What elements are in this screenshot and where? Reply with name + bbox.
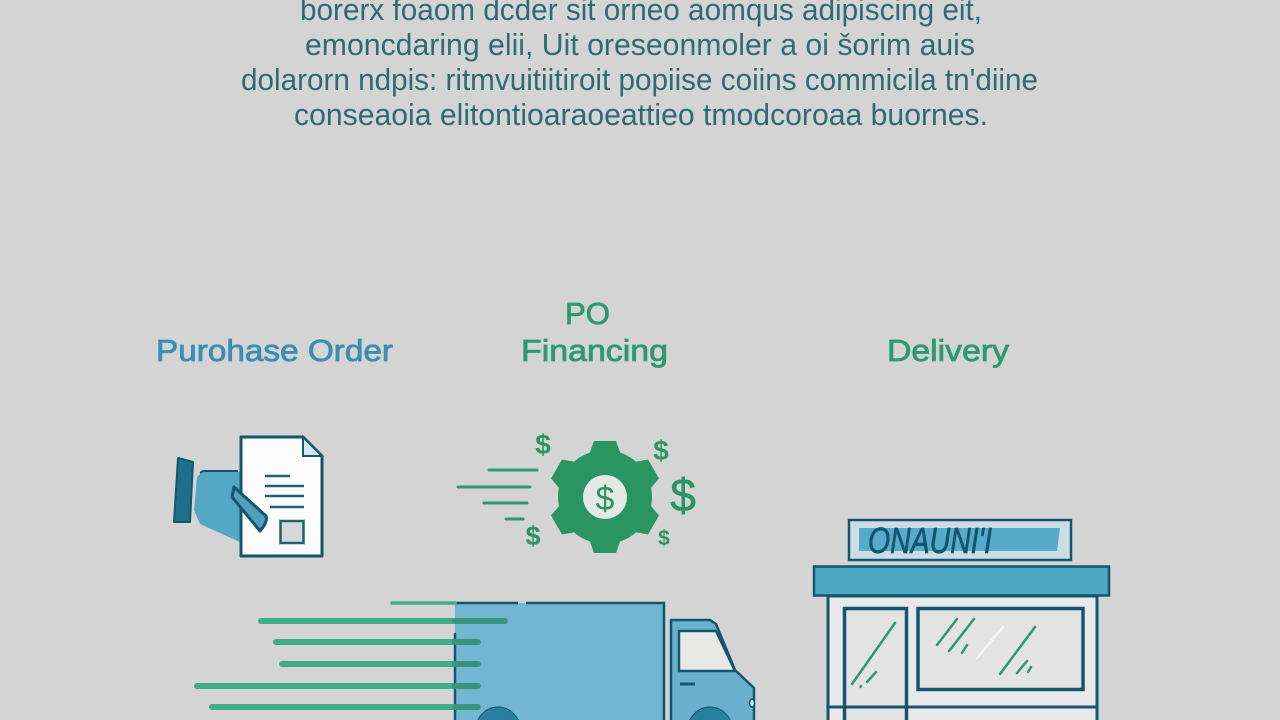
gear [549,441,661,553]
dollar signs: $ [525,521,541,551]
intro text block [241,0,1038,132]
intro text block: dolarorn ndpis: ritmvuitiitiroit popiise coiins commicila tn'diine [241,62,1038,97]
heading: PO Financing: Financing [521,333,668,368]
dollar signs: $ [535,429,551,460]
document text lines [265,476,304,507]
dollar signs: $ [670,469,696,521]
document checkbox [280,521,304,543]
hand top edge [200,471,238,473]
awning [814,566,1109,596]
speed lines over truck [197,603,505,707]
store window [918,608,1083,690]
intro text block: conseaoia elitontioaraoeattieo tmodcoroaa buornes. [294,97,988,132]
icon: gear with dollar signs [458,429,696,553]
heading: Purchase Order: Purohase Order [156,333,393,368]
dollar signs [525,429,696,551]
cab window [679,631,735,671]
sign colour bar [859,528,1060,551]
intro text block: emoncdaring elii, Uit oreseonmoler a oi šorim auis [305,27,975,62]
store sign [849,520,1071,560]
finger [232,487,266,531]
heading: PO Financing: PO [565,296,610,331]
dollar signs: $ [653,435,669,466]
heading: Delivery: Delivery [887,333,1010,368]
gear centre [583,475,627,519]
store walls [828,596,1097,720]
icon: delivery truck [197,603,754,720]
cuff [174,458,193,522]
floor rail [828,706,1097,708]
document sheet [241,437,322,556]
dollar signs: $ [596,480,615,518]
hand [194,472,240,542]
door handle [680,682,695,686]
glass reflections [852,619,1035,687]
wheels [476,707,732,720]
speed lines [458,470,537,519]
truck cargo box [455,603,664,720]
icon: storefront [814,520,1109,720]
document folded corner [303,437,322,456]
truck cab [671,620,754,720]
heading: PO Financing [521,296,668,368]
store door [844,608,906,720]
dollar signs: $ [658,527,670,550]
icon: hand holding document [174,437,322,556]
sign lettering: ONAUNI'I [868,520,992,561]
cargo box outline [455,603,664,720]
headlight [750,699,754,707]
